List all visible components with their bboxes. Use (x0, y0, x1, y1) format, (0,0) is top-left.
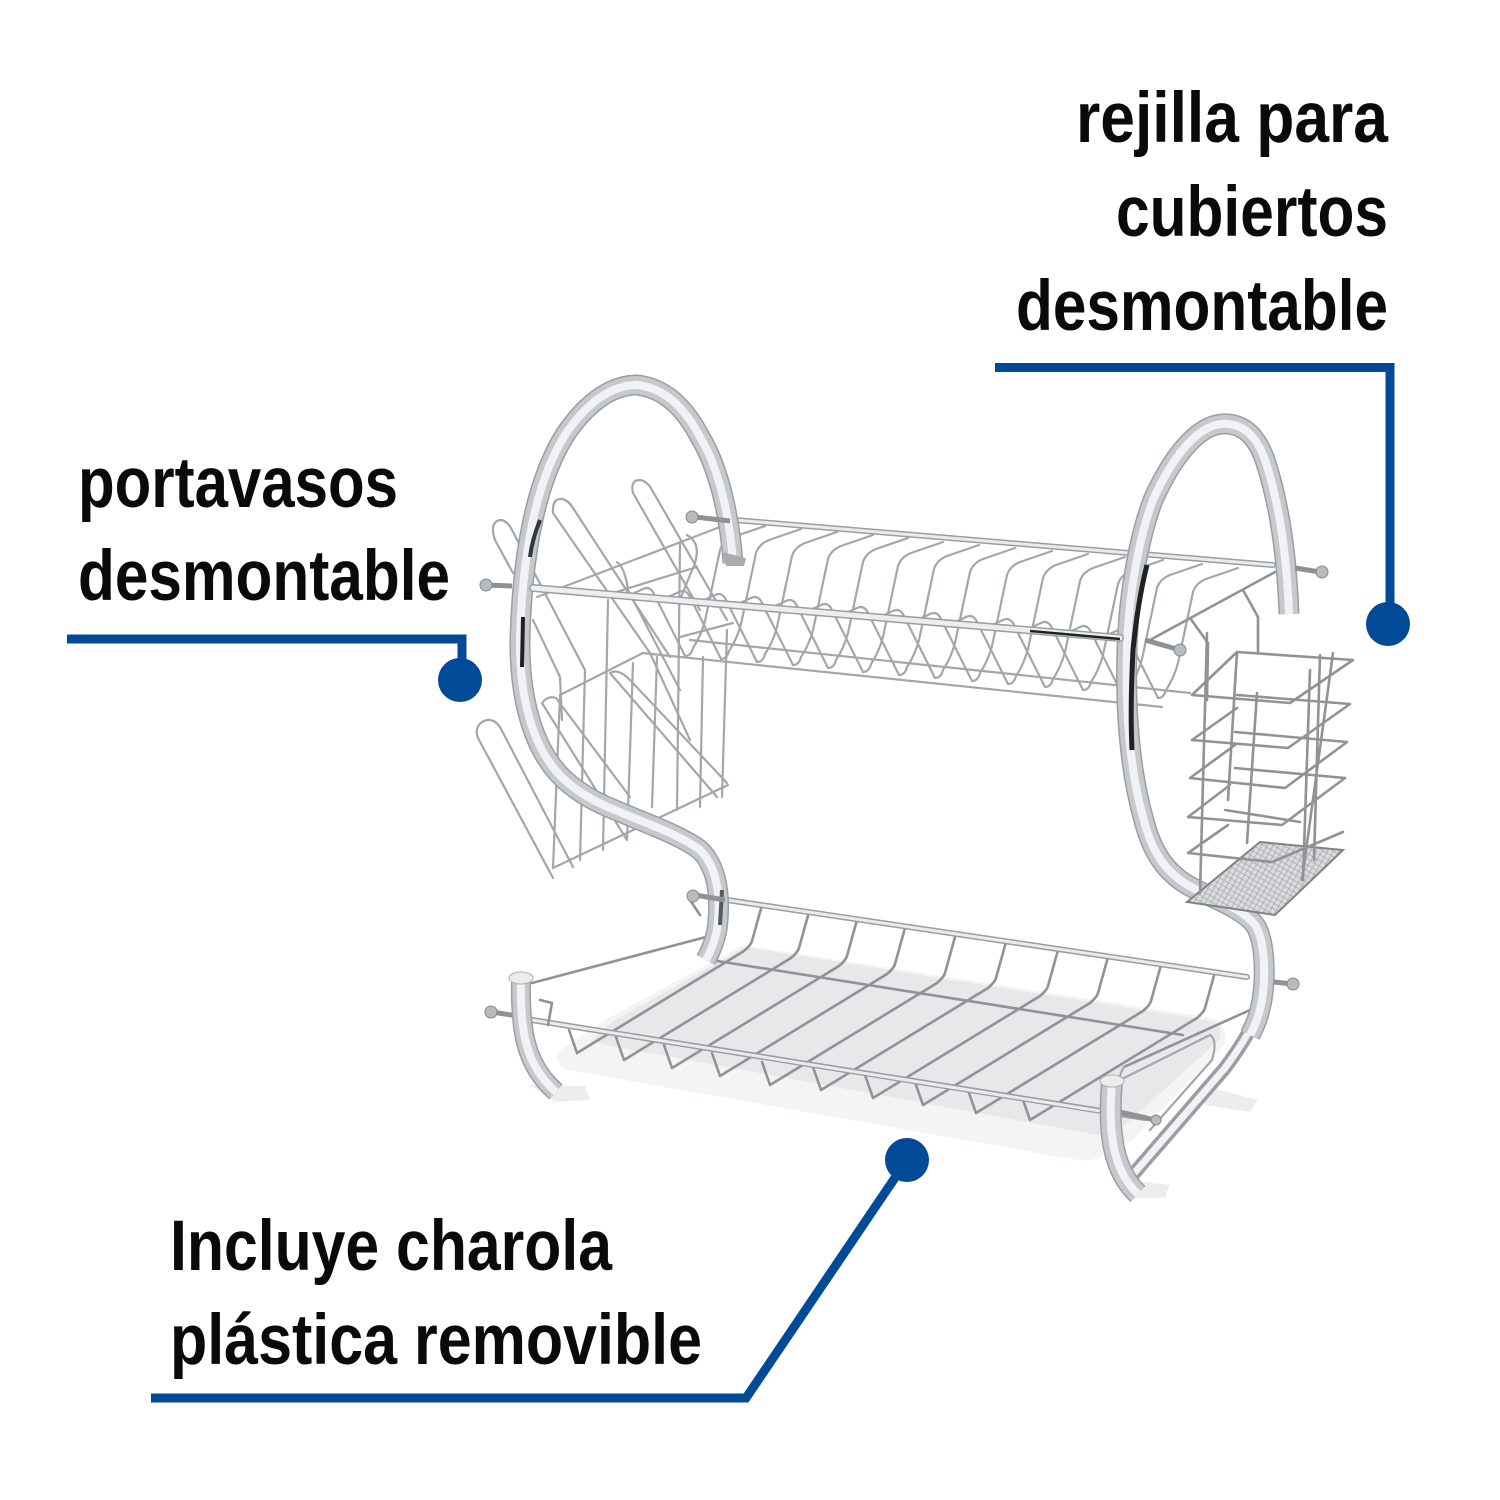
heading: portavasos desmontable: portavasos (78, 444, 398, 523)
heading: Incluye charola plástica removible: plástica removible (170, 1301, 702, 1380)
callout line and dot: plastic tray (151, 1138, 929, 1398)
front left foot (509, 972, 556, 1092)
callout line and dot: cutlery rack (995, 368, 1410, 646)
right S-shaped tube (1127, 424, 1289, 1035)
lower wire rack (532, 900, 1250, 1130)
product: chrome dish rack (477, 385, 1353, 1198)
heading: Incluye charola plástica removible: Incluye charola (170, 1207, 612, 1286)
mesh base (1187, 842, 1343, 915)
upper wire rack (630, 520, 1275, 707)
cup holder wire frame (477, 480, 733, 878)
cutlery holder (1187, 590, 1353, 915)
heading: portavasos desmontable: desmontable (78, 537, 450, 616)
heading: Incluye charola plástica removible (170, 1207, 702, 1380)
heading: rejilla para cubiertos desmontable: cubiertos (1116, 173, 1388, 252)
heading: portavasos desmontable (78, 444, 450, 616)
front right foot (1100, 1075, 1138, 1194)
heading: rejilla para cubiertos desmontable (1016, 79, 1388, 346)
callout line and dot: cup holder (67, 639, 482, 702)
bolts (480, 511, 1328, 1125)
rear right lower tube (1130, 1010, 1258, 1178)
cutlery holder wires (1188, 590, 1353, 893)
heading: rejilla para cubiertos desmontable: desmontable (1016, 267, 1388, 346)
plastic drip tray (530, 945, 1258, 1198)
front rail upper (533, 588, 1120, 639)
heading: rejilla para cubiertos desmontable: rejilla para (1076, 79, 1388, 158)
left S-shaped tube (520, 385, 746, 960)
